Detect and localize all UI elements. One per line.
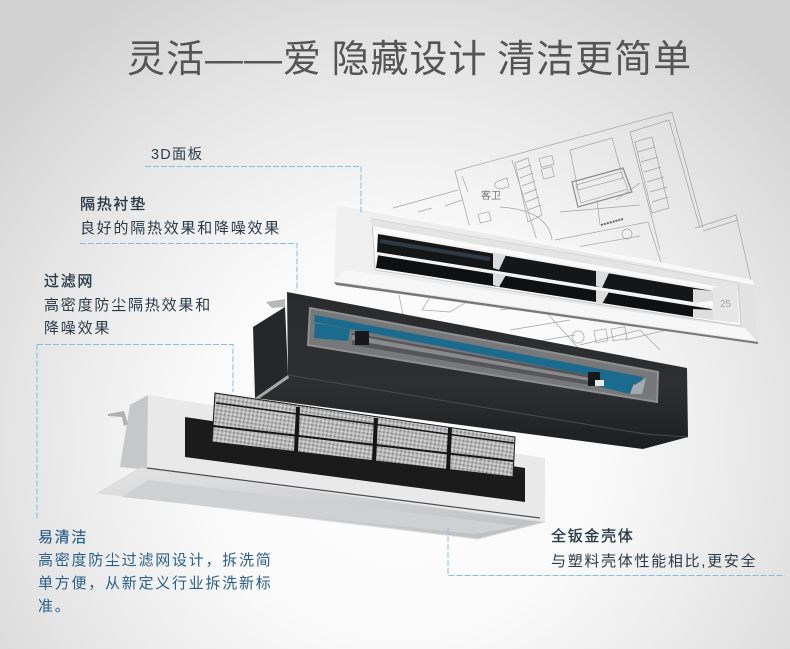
label: easy cleaning bbox=[38, 529, 273, 615]
black duct unit bbox=[253, 292, 688, 449]
3D panel bbox=[334, 200, 758, 344]
washable filter bbox=[212, 393, 515, 477]
white filter unit bbox=[98, 393, 545, 539]
label: easy cleaning: 易清洁 bbox=[38, 529, 88, 546]
label: easy cleaning: 单方便，从新定义行业拆洗新标 bbox=[38, 575, 273, 592]
leader lines bbox=[37, 166, 785, 576]
upper air slot bbox=[377, 233, 713, 302]
duct window bbox=[308, 308, 658, 402]
label: insulation lining: 隔热衬垫 bbox=[80, 196, 147, 213]
label: 3D panel: 3D面板 bbox=[151, 145, 203, 163]
panel display reading: 25 bbox=[720, 299, 732, 310]
label: filter mesh: 高密度防尘隔热效果和 bbox=[44, 297, 212, 314]
label: insulation lining bbox=[80, 196, 281, 237]
label: sheet metal shell bbox=[551, 527, 757, 570]
cover plate bbox=[98, 468, 545, 539]
label: easy cleaning: 准。 bbox=[38, 598, 72, 615]
floor plan line drawing bbox=[393, 112, 752, 350]
label: filter mesh bbox=[44, 273, 212, 337]
label: filter mesh: 过滤网 bbox=[44, 273, 94, 290]
label: filter mesh: 降噪效果 bbox=[44, 320, 111, 337]
floor plan room label: 客卫 bbox=[481, 189, 501, 202]
label: sheet metal shell: 全钣金壳体 bbox=[551, 527, 635, 545]
label: insulation lining: 良好的隔热效果和降噪效果 bbox=[80, 220, 281, 237]
display window bbox=[713, 285, 739, 323]
black opening bbox=[185, 417, 525, 502]
label: easy cleaning: 高密度防尘过滤网设计，拆洗简 bbox=[38, 552, 273, 569]
title: 灵活——爱 隐藏设计 清洁更简单 bbox=[127, 39, 692, 81]
label: sheet metal shell: 与塑料壳体性能相比,更安全 bbox=[551, 552, 757, 570]
lower air slot bbox=[376, 255, 713, 317]
